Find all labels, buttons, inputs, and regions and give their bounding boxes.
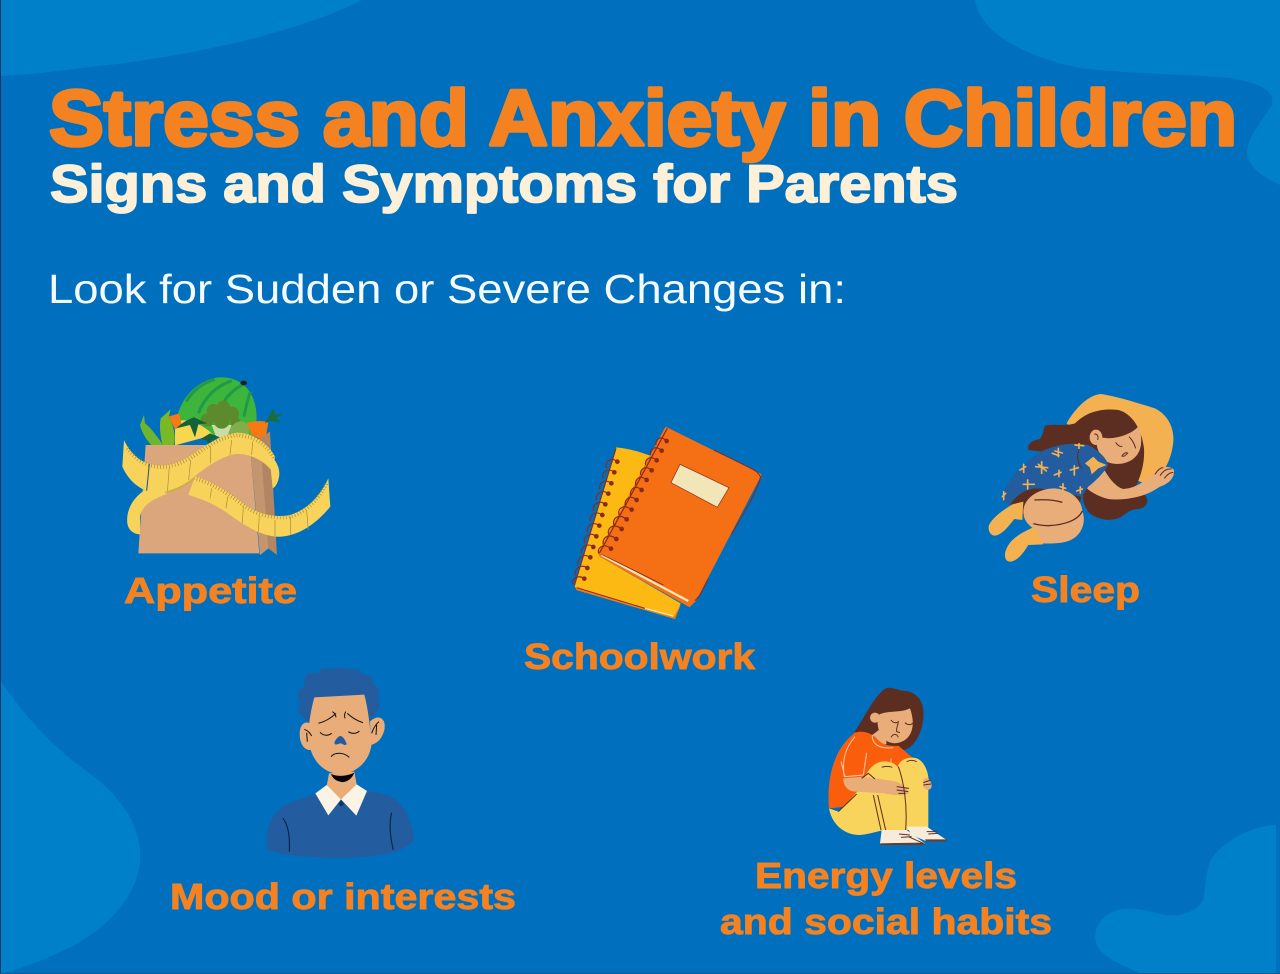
label: Appetite: Appetite bbox=[124, 570, 297, 611]
icon: grocery bag with measuring tape bbox=[122, 377, 330, 555]
icon: sad boy bbox=[267, 668, 414, 858]
label: Schoolwork: Schoolwork bbox=[524, 636, 756, 677]
label: Sleep: Sleep bbox=[1031, 569, 1140, 610]
label: Energy levels and social habits: and social habits bbox=[720, 901, 1052, 942]
icon: sleeping girl bbox=[989, 394, 1174, 562]
label: Energy levels and social habits bbox=[720, 855, 1052, 942]
icon: notebooks bbox=[572, 428, 761, 619]
subtitle: Signs and Symptoms for Parents bbox=[50, 155, 958, 214]
icon: sad girl hugging knees bbox=[828, 688, 947, 845]
label: Energy levels and social habits: Energy levels bbox=[755, 855, 1017, 896]
title: Stress and Anxiety in Children bbox=[49, 73, 1237, 162]
intro text: Look for Sudden or Severe Changes in: bbox=[48, 266, 846, 312]
label: Mood or interests: Mood or interests bbox=[170, 876, 516, 917]
